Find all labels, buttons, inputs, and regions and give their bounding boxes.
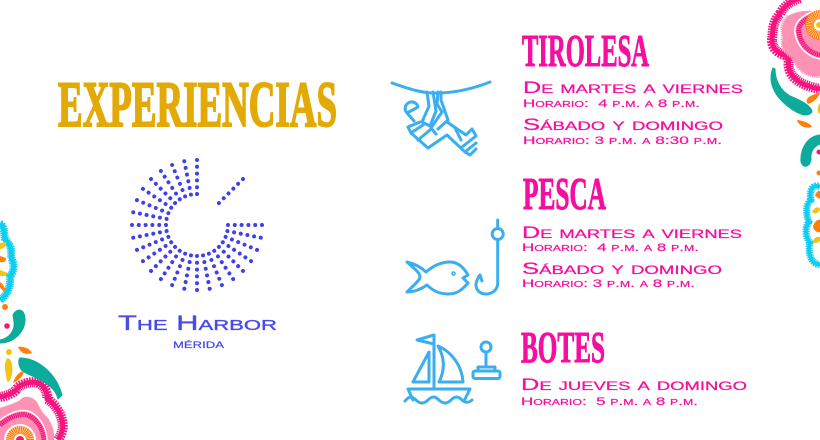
schedule: Pesca: De martes a viernes (522, 224, 742, 242)
schedule: Tirolesa (523, 79, 743, 147)
logo text: Mérida: MÉRIDA (173, 340, 224, 350)
decoration: top right embroidery (771, 0, 820, 264)
schedule: Botes: Horario: 5 p.m. a 8 p.m. (521, 396, 698, 408)
schedule: Tirolesa: De martes a viernes (523, 79, 743, 97)
heading: Pesca: PESCA (523, 168, 606, 219)
icon: sailboat and buoy (405, 335, 500, 403)
schedule: Pesca: Horario: 4 p.m. a 8 p.m. (522, 242, 699, 254)
schedule: Botes (521, 376, 747, 408)
schedule: Tirolesa: Horario: 4 p.m. a 8 p.m. (523, 98, 700, 110)
schedule: Pesca: Horario: 3 p.m. a 8 p.m. (522, 278, 695, 290)
schedule: Tirolesa: Sábado y domingo (523, 116, 723, 134)
heading: Botes: BOTES (521, 323, 605, 372)
title: EXPERIENCIAS (58, 69, 337, 141)
decoration: bottom left embroidery (0, 224, 63, 440)
schedule: Tirolesa: Horario: 3 p.m. a 8:30 p.m. (523, 135, 722, 147)
heading: Tirolesa: TIROLESA (522, 25, 649, 76)
logo text: The Harbor: The Harbor (118, 312, 277, 335)
schedule: Pesca: Sábado y domingo (522, 260, 722, 278)
icon: fish and hook (407, 220, 503, 294)
logo: dotted circle (132, 160, 262, 290)
schedule: Botes: De jueves a domingo (521, 376, 747, 394)
icon: zipline climber (392, 82, 490, 155)
schedule: Pesca (522, 224, 742, 290)
